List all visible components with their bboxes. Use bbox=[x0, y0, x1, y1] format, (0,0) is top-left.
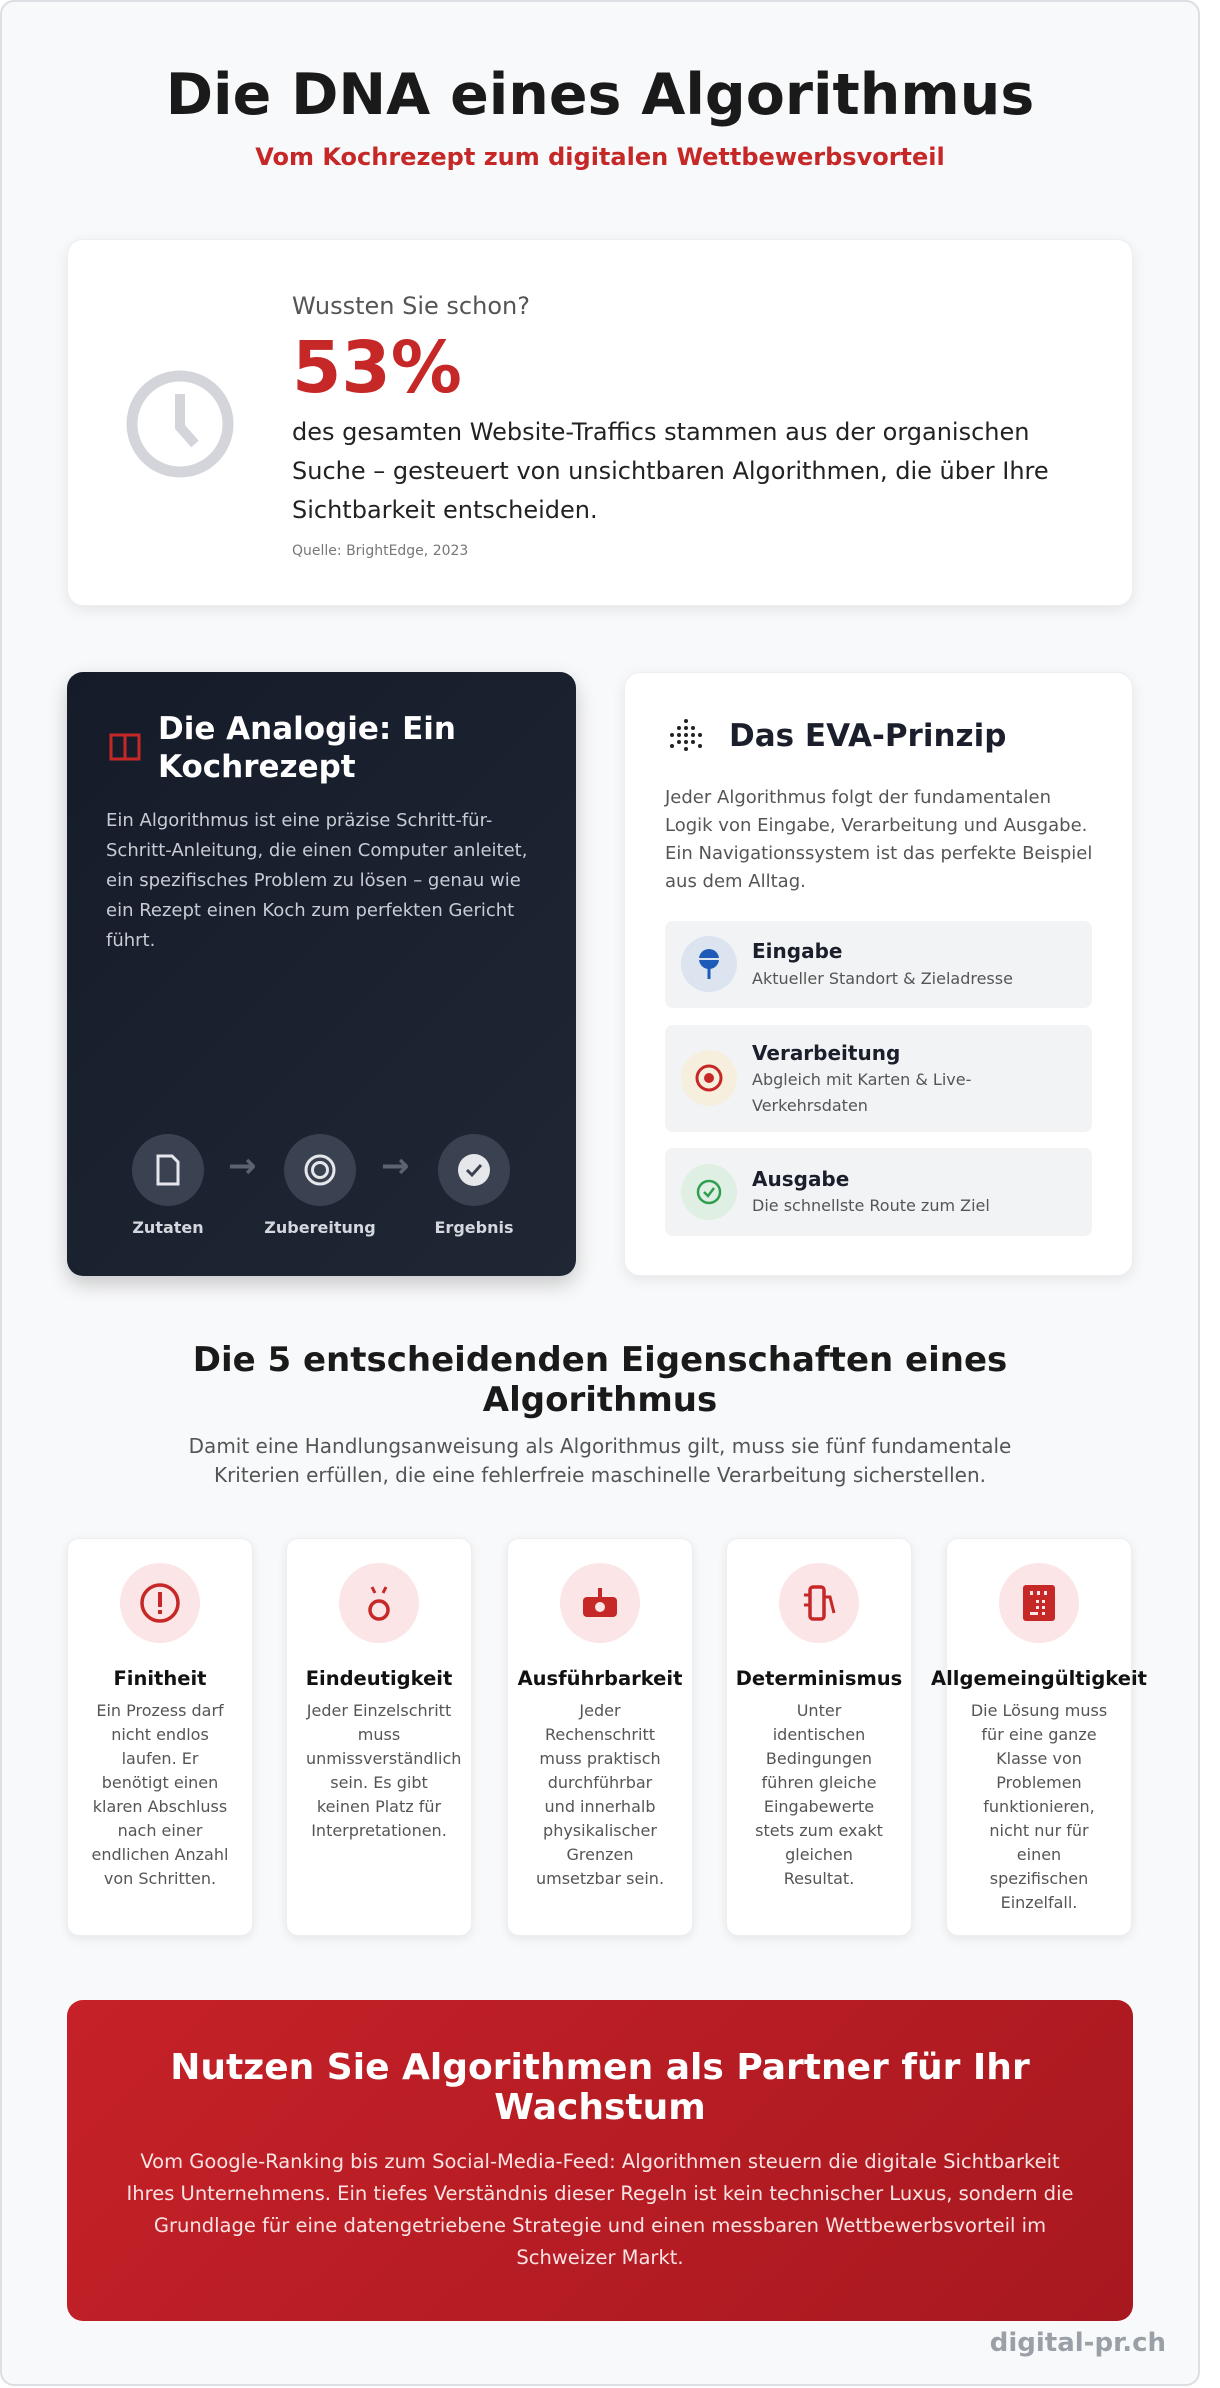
card: Finitheit bbox=[67, 1538, 253, 1936]
card: Finitheit: Finitheit bbox=[113, 1667, 206, 1690]
item: Verarbeitung: Verarbeitung bbox=[752, 1041, 900, 1065]
icon: book bbox=[110, 734, 140, 760]
card: Ausführbarkeit: Ausführbarkeit bbox=[518, 1667, 682, 1690]
item: Ausgabe bbox=[665, 1148, 1092, 1236]
item: Verarbeitung bbox=[665, 1025, 1092, 1132]
section heading: Die 5 entscheidenden Eigenschaften eines Algorithmus bbox=[193, 1340, 1007, 1420]
stat text: des gesamten Website-Traffics stammen aus der organischen Suche – gesteuert von unsichtbaren Algorithmen, die über Ihre Sichtbarkeit entscheiden. bbox=[292, 418, 1049, 524]
text: EVA: Jeder Algorithmus folgt der fundamentalen Logik von Eingabe, Verarbeitung und Ausgabe. Ein Navigationssystem ist das perfekte Beispiel aus dem Alltag. bbox=[665, 787, 1092, 892]
section subtitle: Damit eine Handlungsanweisung als Algorithmus gilt, muss sie fünf fundamentale Kriterien erfüllen, die eine fehlerfreie maschinelle Verarbeitung sicherstellen. bbox=[189, 1434, 1011, 1487]
stat text: 53% bbox=[292, 326, 462, 409]
item: Eingabe: Aktueller Standort & Zieladresse bbox=[752, 969, 1013, 988]
item: Verarbeitung: Abgleich mit Karten & Live-Verkehrsdaten bbox=[752, 1070, 971, 1115]
steps bbox=[132, 1134, 513, 1237]
card: Ausführbarkeit: Jeder Rechenschritt muss praktisch durchführbar und innerhalb physikalischer Grenzen umsetzbar sein. bbox=[536, 1701, 664, 1888]
callout: CTA: Nutzen Sie Algorithmen als Partner für Ihr Wachstum bbox=[170, 2047, 1030, 2128]
steps: Ergebnis bbox=[434, 1218, 513, 1237]
card: Finitheit: Ein Prozess darf nicht endlos laufen. Er benötigt einen klaren Abschluss nach einer endlichen Anzahl von Schritten. bbox=[92, 1701, 228, 1888]
card: Ausführbarkeit bbox=[507, 1538, 693, 1936]
stat text: Wussten Sie schon? bbox=[292, 292, 530, 320]
card: Eindeutigkeit: Eindeutigkeit bbox=[306, 1667, 452, 1690]
steps: → bbox=[381, 1146, 410, 1186]
icon: dots bbox=[670, 719, 702, 751]
title: Die DNA eines Algorithmus bbox=[166, 62, 1034, 128]
panel: EVA bbox=[624, 672, 1133, 1276]
steps: → bbox=[228, 1146, 256, 1186]
card: Allgemeingültigkeit: Allgemeingültigkeit bbox=[931, 1667, 1147, 1690]
steps: Zubereitung bbox=[264, 1218, 376, 1237]
heading: Die Analogie: Ein Kochrezept bbox=[158, 711, 456, 785]
heading: EVA: Das EVA-Prinzip bbox=[729, 718, 1006, 754]
footer: digital-pr.ch bbox=[990, 2328, 1166, 2358]
callout: CTA bbox=[67, 2000, 1133, 2321]
item: Eingabe bbox=[665, 921, 1092, 1008]
card: Allgemeingültigkeit: Die Lösung muss für eine ganze Klasse von Problemen funktionieren, nicht nur für einen spezifischen Einzelfall. bbox=[971, 1701, 1107, 1912]
card: Eindeutigkeit bbox=[286, 1538, 472, 1936]
icon: clock bbox=[126, 370, 234, 478]
text: Ein Algorithmus ist eine präzise Schritt-für-Schritt-Anleitung, die einen Computer anleitet, ein spezifisches Problem zu lösen – genau wie ein Rezept einen Koch zum perfekten Gericht führt. bbox=[106, 810, 527, 951]
card: Determinismus: Unter identischen Bedingungen führen gleiche Eingabewerte stets zum exakt gleichen Resultat. bbox=[755, 1701, 883, 1888]
subtitle: Vom Kochrezept zum digitalen Wettbewerbsvorteil bbox=[255, 143, 945, 171]
item: Ausgabe: Ausgabe bbox=[752, 1167, 849, 1191]
panel: analogy bbox=[67, 672, 576, 1276]
stat text: Quelle: BrightEdge, 2023 bbox=[292, 543, 468, 559]
card: Eindeutigkeit: Jeder Einzelschritt muss unmissverständlich sein. Es gibt keinen Platz für Interpretationen. bbox=[306, 1701, 461, 1840]
card: Allgemeingültigkeit bbox=[946, 1538, 1132, 1936]
card: Determinismus bbox=[726, 1538, 912, 1936]
steps: Zutaten bbox=[132, 1218, 204, 1237]
item: Eingabe: Eingabe bbox=[752, 939, 842, 963]
card: Determinismus: Determinismus bbox=[736, 1667, 902, 1690]
stat text bbox=[292, 292, 1049, 559]
panel: stat card bbox=[67, 239, 1133, 606]
callout: CTA: Vom Google-Ranking bis zum Social-Media-Feed: Algorithmen steuern die digitale Sichtbarkeit Ihres Unternehmens. Ein tiefes Verständnis dieser Regeln ist kein technischer Luxus, sondern die Grundlage für eine datengetriebene Strategie und einen messbaren Wettbewerbsvorteil im Schweizer Markt. bbox=[126, 2150, 1073, 2269]
item: Ausgabe: Die schnellste Route zum Ziel bbox=[752, 1196, 990, 1215]
